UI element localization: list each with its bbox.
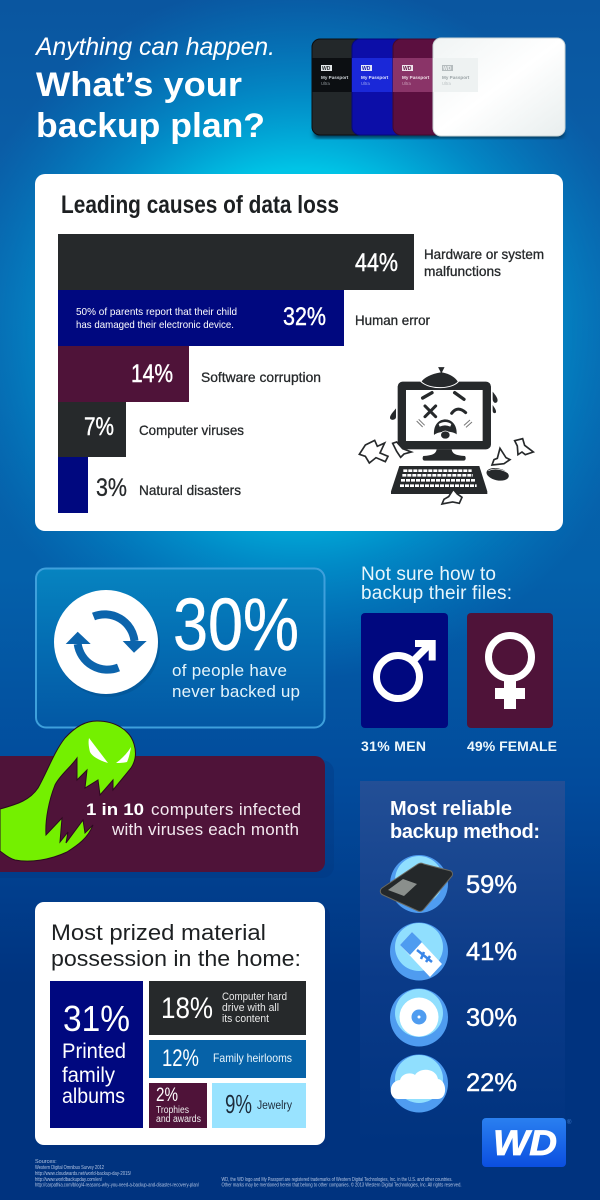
tile: family heirlooms 12%: 12% xyxy=(162,1045,199,1072)
panel: 30% never backed up xyxy=(36,568,324,728)
image: four My Passport hard drives: WD xyxy=(322,66,331,72)
tile: trophies and awards 2%: 2% xyxy=(156,1085,178,1106)
title: What’s your xyxy=(36,66,242,104)
heading: most prized: possession in the home: xyxy=(51,946,301,971)
heading: most reliable xyxy=(390,798,540,843)
bar: software corruption 14%: Software corruption xyxy=(201,369,321,385)
logo: WD: WD xyxy=(493,1124,557,1163)
bar: human error 32% xyxy=(58,290,430,346)
tile: computer hard drive 18%: 18% xyxy=(161,992,213,1025)
icon: female symbol card xyxy=(467,613,553,728)
tile: printed family albums 31% xyxy=(50,981,143,1128)
footer: legal notice: Other marks may be mentioned herein that belong to other companies. © 2013 Western Digital Technologies, Inc. All rights reserved. xyxy=(222,1182,462,1189)
bar: computer viruses 7%: Computer viruses xyxy=(139,422,244,438)
footer: legal notice xyxy=(222,1177,462,1189)
image: four My Passport hard drives: My Passport xyxy=(442,75,470,80)
tile: trophies and awards 2% xyxy=(149,1083,207,1128)
tile: family heirlooms 12% xyxy=(149,1040,306,1078)
bar: hardware 44% xyxy=(58,234,544,290)
image: four My Passport hard drives: Ultra xyxy=(321,81,331,86)
text: infection rate: with viruses each month xyxy=(111,820,299,839)
text: infection rate: computers infected xyxy=(151,800,301,819)
tile: jewelry 9%: Jewelry xyxy=(257,1100,292,1112)
row: external drive 59% xyxy=(380,855,517,913)
heading: not sure xyxy=(361,564,512,604)
image: four My Passport hard drives: WD xyxy=(403,66,412,72)
bar: hardware 44%: malfunctions xyxy=(424,263,501,279)
bar: software corruption 14%: 14% xyxy=(131,360,173,388)
tile: computer hard drive 18%: Computer hard xyxy=(222,991,287,1003)
heading: not sure: Not sure how to xyxy=(361,564,496,585)
tile: computer hard drive 18%: its content xyxy=(222,1013,269,1025)
tile: printed family albums 31%: Printed xyxy=(62,1040,126,1063)
image: four My Passport hard drives: Ultra xyxy=(442,81,452,86)
panel: most prized possession xyxy=(35,902,330,1149)
image: four My Passport hard drives xyxy=(312,38,565,138)
row: external drive 59%: 59% xyxy=(466,871,517,899)
footer: sources: Western Digital Omnibus Survey 2012 xyxy=(35,1165,104,1171)
heading: leading causes: Leading causes of data loss xyxy=(61,191,339,219)
footer: sources xyxy=(35,1159,199,1188)
heading: most reliable: Most reliable xyxy=(390,798,512,820)
tile: trophies and awards 2%: and awards xyxy=(156,1114,201,1125)
image: four My Passport hard drives: WD xyxy=(443,66,452,72)
bar: software corruption 14% xyxy=(58,346,321,402)
caption: never backed up: never backed up xyxy=(172,682,300,701)
title: backup plan? xyxy=(36,107,265,145)
logo: WD: ® xyxy=(567,1119,572,1126)
bar: hardware 44%: 44% xyxy=(355,249,398,277)
icon: sync arrows xyxy=(54,590,160,697)
icon: male symbol card xyxy=(361,613,448,728)
heading: most prized xyxy=(51,920,301,971)
image: four My Passport hard drives: My Passport xyxy=(321,75,349,80)
label: 49% female: 49% FEMALE xyxy=(467,738,557,754)
tile: printed family albums 31%: albums xyxy=(62,1085,125,1108)
title: Anything can happen. xyxy=(34,33,275,61)
footer: sources: http://www.cloudwards.net/world-backup-day-2015/ xyxy=(35,1171,131,1177)
tile: family heirlooms 12%: Family heirlooms xyxy=(213,1051,292,1065)
footer: sources: http://carpathia.com/blog/4-reasons-why-you-need-a-backup-and-disaster-recovery-plan/ xyxy=(35,1182,199,1188)
bar: natural disasters 3%: Natural disasters xyxy=(139,482,241,498)
image: four My Passport hard drives: My Passport xyxy=(402,75,430,80)
heading: most reliable: backup method: xyxy=(390,821,540,843)
title xyxy=(34,33,275,145)
panel: leading causes of data loss xyxy=(35,174,563,531)
tile: printed family albums 31%: 31% xyxy=(63,998,130,1039)
footer: legal notice: WD, the WD logo and My Passport are registered trademarks of Western Digital Technologies, Inc. in the U.S. and other countries. xyxy=(222,1177,453,1183)
caption: never backed up: of people have xyxy=(172,661,287,680)
image: four My Passport hard drives: WD xyxy=(362,66,371,72)
bar: computer viruses 7%: 7% xyxy=(84,413,114,441)
text: infection rate xyxy=(86,800,301,839)
bar: natural disasters 3% xyxy=(58,457,241,513)
bar: hardware 44%: Hardware or system xyxy=(424,246,544,262)
row: optical disc 30% xyxy=(390,988,517,1046)
tile: computer hard drive 18%: drive with all xyxy=(222,1002,279,1014)
tile: computer hard drive 18% xyxy=(149,981,306,1035)
icon: sick computer xyxy=(359,367,533,504)
footer: sources: Sources: xyxy=(35,1159,57,1165)
bar: human error 32%: 50% of parents report that their child xyxy=(76,306,237,318)
bar: human error 32%: 32% xyxy=(283,303,326,331)
label: 31% men: 31% MEN xyxy=(361,738,426,754)
bar: human error 32%: has damaged their electronic device. xyxy=(76,319,234,331)
tile: jewelry 9% xyxy=(212,1083,306,1128)
bar: natural disasters 3%: 3% xyxy=(96,474,127,502)
section: not sure how to backup xyxy=(361,564,557,754)
row: optical disc 30%: 30% xyxy=(466,1004,517,1032)
footer: sources: http://www.worldbackupday.com/en/ xyxy=(35,1177,102,1183)
row: cloud 22% xyxy=(390,1054,517,1112)
tile: printed family albums 31%: family xyxy=(62,1064,115,1087)
bar: computer viruses 7% xyxy=(58,402,244,457)
tile: trophies and awards 2%: Trophies xyxy=(156,1105,189,1116)
row: USB stick 41%: 41% xyxy=(466,938,517,966)
banner: 1 in 10 computers infected xyxy=(0,721,334,878)
icon: green virus monster xyxy=(0,721,135,861)
bar: human error 32%: Human error xyxy=(355,312,430,328)
text: infection rate: 1 in 10 xyxy=(86,800,144,819)
caption: never backed up xyxy=(172,661,300,701)
stat: 30%: 30% xyxy=(173,583,299,666)
tile: jewelry 9%: 9% xyxy=(225,1089,252,1119)
image: four My Passport hard drives: Ultra xyxy=(361,81,371,86)
panel: most reliable backup method xyxy=(360,781,565,1145)
row: cloud 22%: 22% xyxy=(466,1069,517,1097)
image: four My Passport hard drives: Ultra xyxy=(402,81,412,86)
heading: not sure: backup their files: xyxy=(361,583,512,604)
logo: WD xyxy=(482,1118,572,1167)
heading: most prized: Most prized material xyxy=(51,920,266,945)
image: four My Passport hard drives: My Passport xyxy=(361,75,389,80)
row: USB stick 41% xyxy=(390,922,517,980)
